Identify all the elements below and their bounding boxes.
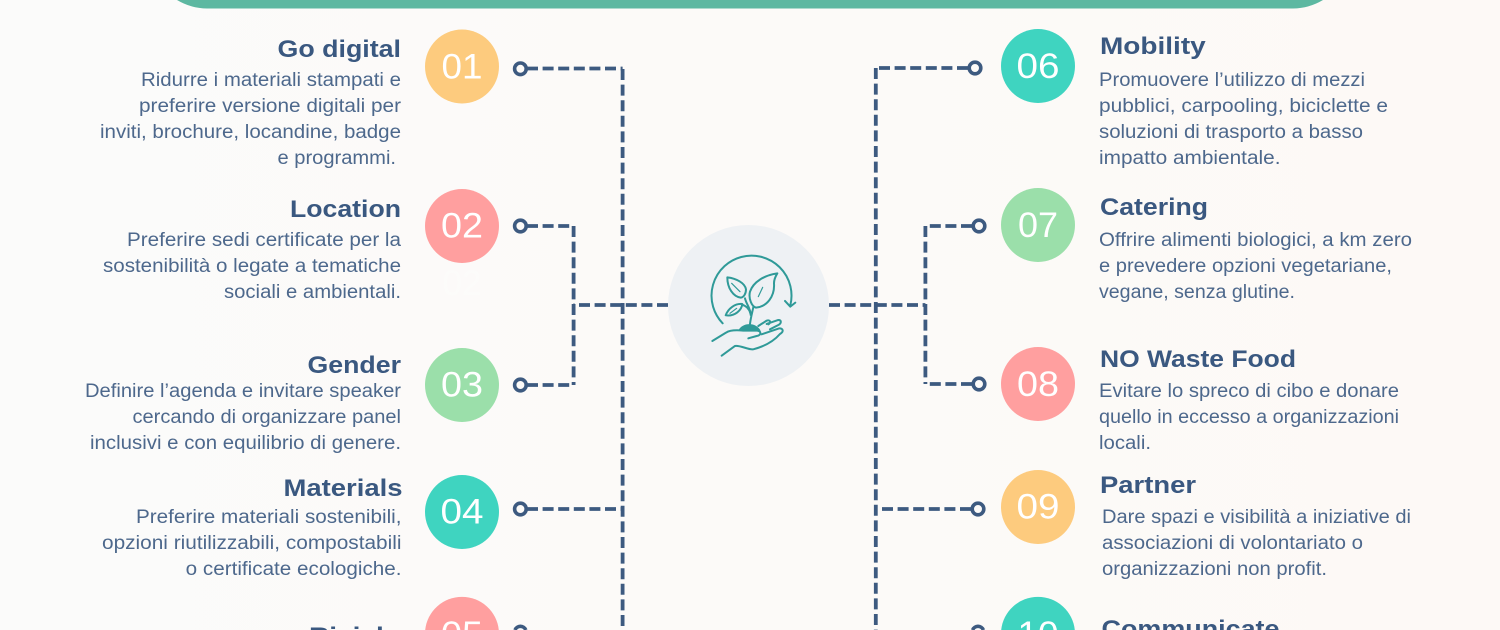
item 08 NO Waste Food: quello in eccesso a organizzazioni xyxy=(1099,407,1399,428)
item 07 Catering xyxy=(1001,188,1412,303)
item 03 Gender: inclusivi e con equilibrio di genere. xyxy=(90,433,401,454)
item 02 Location: sostenibilità o legate a tematiche xyxy=(103,256,401,277)
item 02 Location: Location xyxy=(290,196,401,223)
item 09 Partner: associazioni di volontariato o xyxy=(1102,533,1363,554)
item 06 Mobility: Mobility xyxy=(1100,33,1206,60)
item 02 Location: 02 xyxy=(443,264,481,303)
item 06 Mobility: soluzioni di trasporto a basso xyxy=(1099,122,1363,143)
item 07 Catering: Offrire alimenti biologici, a km zero xyxy=(1099,230,1412,251)
item 09 Partner: Dare spazi e visibilità a iniziative di xyxy=(1102,507,1411,528)
item 07 Catering: vegane, senza glutine. xyxy=(1099,282,1295,303)
connector lines left xyxy=(515,63,668,630)
item 03 Gender: 03 xyxy=(441,366,483,404)
item 03 Gender: Definire l’agenda e invitare speaker xyxy=(85,381,402,402)
item 09 Partner: Partner xyxy=(1100,472,1197,499)
item 01 Go digital: Ridurre i materiali stampati e xyxy=(141,70,401,91)
item 01 Go digital xyxy=(100,30,499,169)
item 04 Materials: o certificate ecologiche. xyxy=(186,559,402,580)
item 09 Partner xyxy=(1001,470,1411,580)
item 06 Mobility xyxy=(1001,29,1388,169)
item 01 Go digital: preferire versione digitali per xyxy=(139,96,402,117)
item 08 NO Waste Food: 08 xyxy=(1017,365,1059,404)
connector lines right xyxy=(829,62,985,630)
item 07 Catering: 07 xyxy=(1018,206,1058,245)
item 06 Mobility: 06 xyxy=(1016,47,1060,86)
item 05 cropped xyxy=(309,597,499,630)
item 08 NO Waste Food xyxy=(1001,346,1399,454)
item 07 Catering: Catering xyxy=(1100,194,1208,221)
item 06 Mobility: impatto ambientale. xyxy=(1099,148,1280,169)
item 07 Catering: e prevedere opzioni vegetariane, xyxy=(1099,256,1392,277)
item 06 Mobility: Promuovere l’utilizzo di mezzi xyxy=(1099,70,1365,91)
item 03 Gender xyxy=(85,348,499,454)
item 02 Location: Preferire sedi certificate per la xyxy=(127,230,401,251)
header banner xyxy=(177,0,1323,8)
item 01 Go digital: e programmi. xyxy=(278,148,396,169)
item 02 Location: sociali e ambientali. xyxy=(224,282,401,303)
item 08 NO Waste Food: NO Waste Food xyxy=(1100,346,1296,373)
item 01 Go digital: 01 xyxy=(442,48,482,86)
item 01 Go digital: inviti, brochure, locandine, badge xyxy=(100,122,401,143)
item 02 Location xyxy=(103,189,499,303)
item 06 Mobility: pubblici, carpooling, biciclette e xyxy=(1099,96,1388,117)
item 09 Partner: 09 xyxy=(1016,488,1060,526)
item 09 Partner: organizzazioni non profit. xyxy=(1102,559,1327,580)
item 04 Materials: Materials xyxy=(284,475,402,502)
item 04 Materials xyxy=(102,475,499,580)
item 08 NO Waste Food: locali. xyxy=(1099,433,1151,454)
item 01 Go digital: Go digital xyxy=(278,36,401,63)
item 03 Gender: Gender xyxy=(308,352,401,379)
item 02 Location: 02 xyxy=(441,206,483,246)
item 04 Materials: 04 xyxy=(440,492,484,532)
central hub with plant icon xyxy=(668,225,829,386)
icon: plant in hand xyxy=(712,256,795,356)
item 08 NO Waste Food: Evitare lo spreco di cibo e donare xyxy=(1099,381,1399,402)
item 04 Materials: Preferire materiali sostenibili, xyxy=(136,507,402,528)
item 04 Materials: opzioni riutilizzabili, compostabili xyxy=(102,533,402,554)
item 10 Communicate xyxy=(1001,597,1280,630)
item 03 Gender: cercando di organizzare panel xyxy=(132,407,401,428)
